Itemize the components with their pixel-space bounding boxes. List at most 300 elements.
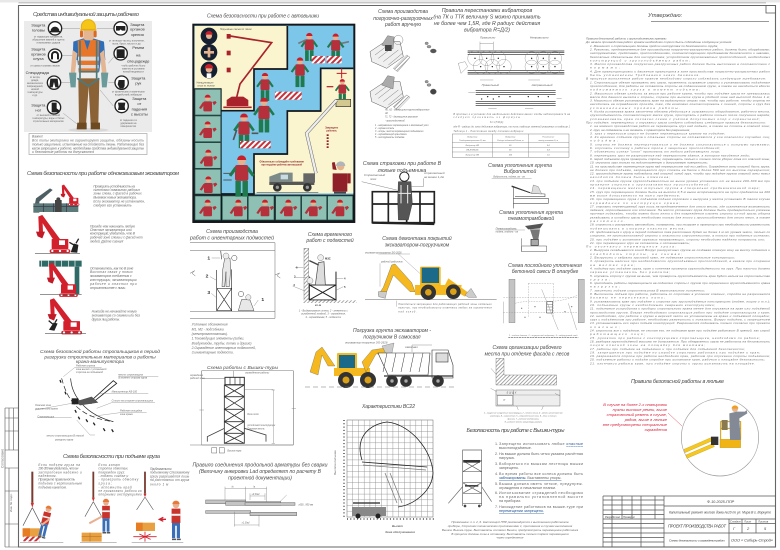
signal workers <box>199 95 349 216</box>
text: safety rules: подвешивать в сторону опасного места; <box>590 226 685 230</box>
list: tower rules: 2. <box>495 452 498 456</box>
diagram: rebar overlap: la <box>232 486 234 488</box>
list: tower rules <box>495 442 583 513</box>
title: approved <box>647 13 769 22</box>
callout: red warning <box>603 402 682 432</box>
diagram: facade workplace: фасада, 7 - рабочие материалы, <box>507 417 540 420</box>
diagram: backhoe loading truck: экскаватор-погрузчик ЭО-2626 <box>345 340 388 344</box>
title: vibrator rule <box>433 8 541 34</box>
diagram: crane manipulator: В момент отрыва груза <box>118 377 148 380</box>
text: safety rules: 2. груз, не поднимать и не снимать с транспорта без разрешения; <box>589 128 690 132</box>
diagram: platform work: М 1:50 <box>315 305 322 307</box>
labels: protection captions: органов <box>130 27 145 32</box>
callout: red warning: рядом, выше в люльке <box>624 417 668 422</box>
note box <box>29 134 147 154</box>
text: lifting notes: подъема с вертикальным <box>38 481 82 485</box>
left binding stamp: Согласовано <box>0 449 4 468</box>
diagram: plate compactor <box>492 175 548 208</box>
left binding stamp: Инв. № подл. <box>9 493 13 512</box>
diagram: platform work: 5 <box>344 285 346 289</box>
panel: PPE infographic: удержании на <box>120 122 137 125</box>
diagram: scaffold: (электромонтажники). <box>192 332 228 336</box>
text: safety rules: укладывать в штабели грузы необходимо только для этого с приспособленных для этого мест, а также <box>589 215 770 219</box>
labels: protection captions: Защита <box>130 22 145 27</box>
text: safety rules: находится должна быть отмечена; <box>590 175 670 179</box>
list: tower rules: Запрещено использовать любые опасные <box>499 442 583 446</box>
title: BC22 characteristics: Характеристики ВС22 <box>361 404 415 410</box>
diagram: scaffold: 1 <box>207 256 210 262</box>
poster background zones <box>194 26 354 221</box>
diagram: backhoe loading truck <box>305 340 455 388</box>
labels: protection captions: Защита <box>131 75 146 80</box>
labels: protection captions: Защита <box>31 103 46 108</box>
diagram: crane manipulator <box>35 365 158 441</box>
title: pavement removal: экскаватором-погрузчиком <box>385 242 450 248</box>
diagram: vibrator placement: Правильный <box>482 83 499 87</box>
title block: Схемы безопасности и ограждения работ <box>669 538 725 542</box>
poster small list: работать <box>326 131 337 133</box>
diagram: platform work: МЗС <box>325 256 331 260</box>
note: PPR note: приборы, Строгими техническими приложениями 1, приложения в случаях выполнения <box>448 524 573 528</box>
diagram: backhoe demolition: наличии, при необходимости отвечать любых на ограничения <box>398 307 492 310</box>
text: lifting notes: подъема канатом. <box>38 485 67 489</box>
text: safety rules: находилась на ограждениях проезда, там, где возможно контактировать с линией, стропы и груз без <box>590 102 771 106</box>
title block: 2 <box>746 526 750 531</box>
text: safety rules: 8. Выполнить подъем при работе, работать со стропами в условиях опасных, стройке не разрешается <box>590 292 770 296</box>
title: slinger safety: крана-манипулятора <box>76 360 124 365</box>
text: lifting notes: 200-300 мм убедитесь, что он <box>37 467 79 471</box>
table: vibration spacing: Расстояние <box>542 137 555 139</box>
title: manual loading: работ вручную <box>384 22 421 28</box>
title: slinger safety: Схема безопасной работы стропальщиков в период <box>40 348 160 355</box>
panel: PPE infographic: и возможных ударов <box>36 41 61 44</box>
diagram: scaffold: 1.Токоведущие элементы (гибки, <box>192 337 244 341</box>
list: tower rules: 6. <box>495 491 498 495</box>
callout: red warning: вне предусмотрены специальные <box>603 422 668 427</box>
panel: PPE infographic: обрушения камней и грунта <box>32 38 65 41</box>
title block: 5 <box>764 526 767 531</box>
labels: protection captions: ног <box>35 107 42 112</box>
text: safety rules: 19. разрешается стропы при работе необходимо кран, рабочим при опускании стропы подъёмника; <box>590 354 770 358</box>
text: safety rules: 13. устанавливать его через подъём конструкций. Разрешается поднимать только согласно при проекте <box>590 321 770 325</box>
table: vibration spacing: Вибратор ИВ <box>466 154 480 156</box>
text: lifting notes: - проверить обмотку <box>98 478 139 482</box>
table: vibration spacing: 60 <box>509 145 512 147</box>
title: pneumatic rammer <box>499 210 563 222</box>
title: soil plate compaction: Схема уплотнения грунта <box>488 163 552 169</box>
title: layered concrete <box>508 262 582 275</box>
text: excavator notes: конструкции, экскаваторщик <box>90 278 137 282</box>
table: vibration spacing: ИВ-47/ИВ-66 <box>466 149 479 152</box>
left binding stamp <box>0 408 18 547</box>
title: slinger safety <box>40 348 160 365</box>
table: vibration spacing: между точками S, м <box>539 139 559 142</box>
diagram: backhoe demolition: рабочий работник <box>380 260 404 263</box>
panel: PPE infographic: чтобы рабочих было <box>121 65 146 68</box>
warning circles <box>201 28 217 78</box>
top-right lift basket <box>327 68 351 107</box>
poster small list <box>260 127 339 167</box>
table: vibration spacing <box>452 134 569 157</box>
title: facade workplace <box>485 345 570 358</box>
text: safety rules: 7. обозначить сигнал "стоп" принимать от любого работающего лица; <box>590 150 720 154</box>
text: safety rules: опасных; <box>590 325 620 329</box>
list: tower rules: 7. <box>495 505 498 509</box>
text: excavator notes: Высотах сваях у новых <box>90 270 133 274</box>
labels: protection captions: падения <box>132 106 147 111</box>
list: tower rules: Во время работы все колеса должны быть <box>499 472 583 476</box>
text: excavator notes: Выемках новых экскаватора. <box>93 196 137 200</box>
labels: protection captions: Ремни <box>132 45 144 50</box>
note box: Все типы экипировки не гарантируют защиты, обязаны носить <box>32 138 144 142</box>
note: PPR note: Вышка. Вышка-туры. Выставлять согласно Вышки, предусмотреть перемещение работника <box>442 528 578 532</box>
scene 4: falling debris <box>45 298 86 334</box>
diagram: facade workplace: 8 - рабочее место штукатура-маляра <box>505 421 543 423</box>
list: tower rules: 3. <box>495 462 498 466</box>
labels: protection captions: с высоты <box>131 112 148 117</box>
scene: hook and crate right <box>132 472 183 542</box>
panel: PPE infographic: низкой видимости <box>123 71 144 74</box>
diagram: backhoe demolition: над зоной. <box>398 310 417 313</box>
panel: PPE infographic: низкой <box>31 88 39 91</box>
list: tower rules: ограждения и начальные планки. <box>499 486 556 490</box>
title block: Капитальный ремонт жилого дома №10 по ул. Мира В г. Воркуте <box>669 510 771 514</box>
text: lifting notes: надежном. <box>38 474 57 478</box>
diagram: manual loading: 4 - ограждающий кран-балка <box>375 133 407 136</box>
text: safety rules: 16. разборка грузоподъёмной машины не допускается. При обнаружении груза не работать на безопасность <box>590 340 770 344</box>
text: excavator notes: Никогда не начинайте новую <box>92 310 137 314</box>
big signal worker <box>332 161 351 194</box>
text: lifting notes <box>37 463 190 497</box>
title block: ООО « Сибирь-Строй» <box>731 538 774 542</box>
diagram: manual loading: А0 <box>384 112 389 115</box>
text: safety rules: устанавливать кран согласно схеме с учётом допустимых опор и ограничений; <box>589 117 760 121</box>
text: lifting notes: опорными инструкциями <box>98 493 142 497</box>
icon: worker figure <box>68 20 108 132</box>
title: lifting safety: Схема безопасности при подъеме груза <box>63 454 161 460</box>
diagram: platform work: 4 <box>344 276 346 280</box>
title block: ПРОЕКТ ПРОИЗВОДСТВА РАБОТ <box>668 524 726 528</box>
text: lifting notes: Если подъем груза на <box>38 463 80 467</box>
text: safety rules: Правила безопасной работы с грузоподъемными кранами: <box>586 36 667 40</box>
title: slinger safety: разгрузки строительных материалов и работы <box>43 354 156 360</box>
diagram: backhoe demolition: экскаватор-погрузчик ЭО-2626 <box>365 252 402 255</box>
text: excavator notes: строительстве с ними. <box>90 286 126 290</box>
text: safety rules: безопасные обязательны для инструктажа; устройством грузозахватных приспособлений, необходимых <box>590 55 770 59</box>
text: safety rules: 3. Машинист обязан устанавливать кран на выдвинутых опорах так, чтобы при работе, чтобы стрелы не <box>590 99 770 103</box>
diagram: crane manipulator: Стропальщик <box>37 415 55 418</box>
labels: protection captions: рук <box>135 80 142 85</box>
list: tower rules: Вышка должна иметь четкие, предупреж. <box>499 482 583 486</box>
text: safety rules: груза; <box>590 277 610 281</box>
diagram: concrete layers <box>503 279 584 337</box>
table: vibration spacing: Радиус действия/Объем, м <box>497 139 524 142</box>
diagram: basket with harness <box>362 172 434 224</box>
diagram: crane manipulator: место строповщика <box>118 373 143 376</box>
title: facade workplace: Схема организации рабочего <box>492 345 562 351</box>
diagram: vibrator placement: S = 1,5 R (1) <box>490 122 503 124</box>
diagram: scaffold: 3.инвентарные подмости. <box>192 351 234 355</box>
text: safety rules: 17. опускать перемещаемый груз лишь на предназначенное для этого место, где исключается возможность <box>590 204 770 208</box>
labels: protection captions: от <box>137 101 141 106</box>
text: safety rules: При подъёме, перемещении и опускании груза следует соблюдать следующие правила безопасности: <box>586 120 766 124</box>
diagram: mobile tower <box>448 450 492 507</box>
panel: PPE infographic <box>24 20 152 132</box>
diagram: crane manipulator: Опасная зона <box>35 404 52 407</box>
text: safety rules: 4. Ко времени подъема груза и стальные стропы не оставляются у зон опасности случайно лиц; <box>590 135 770 139</box>
note: PPR note: В процессе должны силы в остановку. Выставлять только тормоз перемещения <box>451 532 569 536</box>
diagram: crane manipulator: Рабочая стрела <box>76 365 96 368</box>
text: safety rules: проверке стропов и грузозахватных приспособлений; <box>590 182 710 186</box>
diagram: scaffold: 2 <box>206 274 209 280</box>
text: safety rules: 20. при подъёме и установке грузовых направляющих, стропы необходимо надёжно поправить или; <box>589 237 765 241</box>
text: safety rules: освободить стропы, не снимая; <box>590 252 682 256</box>
white boom and truck <box>257 100 337 193</box>
text: safety rules: ограждение по инструкции крана; <box>590 201 680 205</box>
diagram: manual loading: 1 - направление перемещения и возможный угол <box>375 124 429 127</box>
title: basket slinging <box>363 161 442 174</box>
title block: Ф.10.2025-ППР <box>707 500 735 504</box>
text: safety rules: 21. при перемещении груз не оставлять и останавливать; <box>589 241 690 245</box>
diagram: rebar overlap: ≥1,3lad <box>242 522 250 525</box>
title: manual loading: Схема производства <box>378 9 428 15</box>
text: excavator notes: следует его установить <box>93 204 132 208</box>
table: vibration spacing: 0,8 <box>547 150 551 152</box>
labels: protection captions: головы <box>32 28 45 33</box>
diagram: vibrator placement: Неправильный <box>532 83 553 87</box>
diagram: manual loading: А0, А2 - движущиеся крупногабаритные <box>384 109 430 112</box>
diagram: crane manipulator: зона вылет с установкой <box>75 368 107 371</box>
diagram: crane manipulator: разгрузки груза <box>54 438 74 441</box>
chart: working envelope: Зона обслуживания <box>385 530 415 534</box>
diagram: backhoe demolition: Находиться запрещено для работающих рабочей зоны отдельно <box>398 303 492 306</box>
text: safety rules: груз с подъёмником при работе, необходимо разместить и показать. Вокруг подъёма, с запрещением <box>590 318 771 322</box>
text: safety rules: 2. Выгрузить и забрать грузовой крюк, не подвергая строительные конструкции; <box>589 256 735 260</box>
diagram: crane manipulator: Манипулятор АВ-100 <box>112 390 138 393</box>
title: rebar joining rule <box>192 462 328 482</box>
diagram: tower scheme: Блок-пост <box>247 414 259 416</box>
title: vibrator rule: не более чем 1,5R, где R радиус действия <box>434 20 540 27</box>
workers in baskets <box>223 33 349 197</box>
diagram: facade workplace: Б Ш Щ К <box>507 391 517 394</box>
text: excavator notes: Опасные экскаватора или <box>90 228 132 232</box>
diagram: vibrator placement: Неправильно <box>530 35 549 39</box>
panel: PPE infographic: температуры <box>27 91 43 94</box>
diagram: tower scheme: ограждённые работы <box>245 371 270 374</box>
text: safety rules: 1. Выгрузка складывается зоной Вокруг разгрузочных грузов не создавая опасную зону на месту поднятия и <box>590 248 770 252</box>
text: safety rules: подъёма; <box>590 139 618 143</box>
text: safety rules: 14. стропить все с подъёмом, не считая его, не поднимая кран при подъёме работают В прямой, как строй <box>590 328 770 332</box>
text: safety rules: масса для данного вылета и стрелы, стрелы при вылете груза в удобной зоне над высотой более 1 м; <box>590 95 770 99</box>
text: safety rules: 9. устанавливать кран при подъёме и стропах при грузоподъёмных конструкциях (людям, лицом и т.п.); <box>590 299 770 303</box>
icon: second backhoe <box>310 343 394 388</box>
red lift on cream: спуск из люльки <box>197 85 215 87</box>
text: safety rules: работающего лицо; <box>589 332 645 336</box>
text: safety rules: лицом опасной зоны на площадку для монтажа; <box>589 343 705 347</box>
labels: basket harness <box>364 171 445 181</box>
text: safety rules: 8. перемещать груз не разрешается над перекрытием здания, в котором находятся люди; <box>590 153 750 157</box>
title: layered concrete: Схема послойного уплотнения <box>508 262 582 269</box>
diagram: facade workplace: П <box>503 399 505 402</box>
title: pneumatic rammer: пневмотрамбовкой <box>508 215 554 222</box>
text: lifting notes: - вспомнить край <box>98 485 132 489</box>
text: safety rules: приспособления, для работы не оставлять стропы на подвешенном грузе, а также не находиться вблизи <box>590 84 770 88</box>
labels: protection captions: Защита <box>31 47 46 52</box>
labels: protection captions: слуха <box>33 56 44 61</box>
scene 2: excavator hazard <box>35 215 80 254</box>
diagram: platform work: 6 <box>296 265 298 269</box>
text: safety rules: 18. стропить и разгружать автомобили, полувагоны, при погрузке в транспорт при необходимости разместить <box>590 223 770 227</box>
table: vibration spacing: 100 <box>509 154 513 156</box>
panel: PPE infographic: строительных материалов <box>33 120 64 123</box>
text: safety rules: инструментами, средствами, приспособлениями, соответствующими требованиям безопасности и знаками, <box>590 51 770 55</box>
diagram: pneumatic rammer: подача, глубина - см <box>496 231 518 234</box>
panel: PPE infographic: от падения и в <box>120 119 137 122</box>
note box: и безопасные работы на допускаются <box>32 150 94 154</box>
diagram: scaffold: 1 <box>261 297 264 303</box>
text: safety rules: 5. стропы не должны перекручиваться и не должны соприкасаться с острыми кромками; <box>590 142 770 146</box>
text: safety rules: 1. на момент производства работ не перемещать груз над людьми, а также не стоять в опасной зоне; <box>590 124 770 128</box>
diagram: vibrator placement: В простых и в условиях для наибольшего действия ваших чтобы неблокировали S на <box>453 113 571 116</box>
diagram: pneumatic rammer <box>496 223 547 252</box>
diagram: crane manipulator: Рабочая площадка <box>120 410 143 413</box>
list: tower rules: нагрузка. <box>499 456 515 460</box>
panel: PPE infographic: дождя, <box>31 79 39 82</box>
title: loading to truck: погрузчиком В самосвал <box>363 334 421 340</box>
list: tower rules: запрещено. <box>499 466 519 470</box>
text: excavator notes: экскаватора со сваями или без <box>92 314 140 318</box>
text: safety rules: прочные подкладки, чтобы можно было легко и без повреждения извлечь стропы из-под груза; уборка <box>590 212 770 216</box>
title: manual loading: погрузочно-разгрузочных <box>373 16 433 22</box>
panel: PPE infographic: пыли, брызг, кислот и др. <box>112 42 141 45</box>
text: lifting notes: груза; <box>98 481 112 485</box>
note: PPR note: Примечание: п.п. 2, 6. Настоящий ППР рекомендуется к выполнению работников <box>451 520 569 524</box>
title block <box>603 496 776 547</box>
panel: PPE infographic: механических <box>27 82 44 85</box>
icons: protection badges <box>47 22 128 114</box>
illustration: worker in bucket <box>681 399 759 476</box>
table: vibration spacing: 0,6 <box>547 145 551 147</box>
red lift on cream: Подъемные люльки от линии <box>220 29 252 31</box>
title: soil plate compaction: Виброплитой <box>504 168 536 175</box>
panel: PPE infographic: заметно в условиях <box>122 68 145 71</box>
scene 1: trench <box>33 185 79 213</box>
labels: protection captions: Защита <box>31 23 46 28</box>
diagram: scaffold: Воздуховоды, трубы, лотки и другие) <box>192 341 252 345</box>
panel: PPE infographic: от шума и громких звуков <box>30 65 60 68</box>
text: safety rules: падения, опрокидывания или сползания. На место установки груза должны быть предварительно уложены <box>590 208 771 212</box>
text: safety rules: поднимаемого груза в момент подъема; <box>590 88 700 92</box>
text: safety rules: 3. проверить наличие при необходимости грузоподъёмных приспособлений, в начале при опирание <box>590 259 770 263</box>
diagram: vibrator placement: где R - радиус до зоны действия вибратора, то есть таблице значений указанных в таблице 1 <box>453 125 571 128</box>
text: safety rules: 4. Когда установка крана закончена обязана убедиться в исправности оборудования, рабочего места, <box>590 110 770 114</box>
diagram: concrete layers: 1 - подача бетона, 2 - внутренний вибратор, 3 - вибрируемый слой <box>509 334 578 337</box>
text: safety rules: 21. окончании работы кран, при подъёме стропы и грузы установить на площадке. <box>589 361 755 365</box>
list: tower rules: на правильно установленной высоте <box>499 495 583 499</box>
text: safety rules: 2. Машинист обязан следить за весом при работе крана, чтобы при подъёме груза не превышалась <box>589 91 770 95</box>
text: safety rules: грузоподъёмность соответствует массе груза, приступать к работе только после получения наряда; <box>590 113 770 117</box>
text: safety rules: 3. Место производства погрузочно-разгрузочных работ должно быть выполнено в соответствии с <box>590 62 770 66</box>
text: safety rules: До начала производства работ краном необходимо строго быть соблюдены следующие условия: <box>585 40 732 44</box>
diagram: manual loading: 5 - инструменты подъёма <box>375 136 405 139</box>
note: PPR note: через определение <box>497 536 524 540</box>
diagram: crane manipulator: Стоит на стороне стропальщика <box>112 400 153 403</box>
text: safety rules: 14. перемещение мелких штучных грузов в специально предназначенной таре; <box>590 186 760 190</box>
diagram: scaffold: М1, М2 - подсобники <box>192 327 224 331</box>
title: manual loading <box>373 9 433 28</box>
chart: working envelope: Высота подъема <box>333 450 337 475</box>
callout: red warning: страховочный ремень в случае, <box>607 412 667 417</box>
panel: excavator scenes <box>33 184 145 334</box>
diagram: rebar overlap: ≥600...900 мм <box>298 503 314 506</box>
callout: red warning: нужны высокие ремни, выше <box>613 407 668 412</box>
text: safety rules: нормами; <box>590 66 620 70</box>
diagram: facade workplace: 1 - наружные сооружения конструкции, 2 - место лесов, 3 - места изготовления <box>484 412 564 414</box>
text: lifting notes: не прикасаясь рабочи ко <box>98 489 142 493</box>
text: safety rules: 2. Рукоятки, предназначенные для производства погрузочно-разгрузочных работ, должны быть оборудованы; <box>589 48 770 52</box>
table: vibration spacing: 1,0 <box>547 154 551 156</box>
diagram: vibrator placement: следует принимать из формулы <box>453 116 520 119</box>
title: facade workplace: места при отделке фасада с лесов <box>485 352 570 358</box>
title: vibrator rule: (на ТК и ТТК величину S можно принимать <box>433 14 541 20</box>
poster small list: при подъёме рабочих автовышкой <box>261 164 303 167</box>
labels: basket harness: страховочный <box>424 171 445 175</box>
title: loading to truck: Погрузка грунта экскаватором - <box>353 328 431 334</box>
title: basket slinging: Схема страховки при работе В <box>363 161 442 167</box>
diagram: crane manipulator: место стропальщика В период <box>47 435 85 438</box>
left signal panels <box>195 89 353 220</box>
labels: protection captions: органов <box>31 51 46 56</box>
diagram: facade workplace: раствора, 4 - ограждение, 5 - строительная зона, 6 - леса с люлька <box>489 414 557 417</box>
text: safety rules: 6. опускать систему и рабочие тросы с защитных приспособлений; <box>590 146 720 150</box>
text: safety rules: 13. при подъёме грузов грузоподъёмностью не выше уровня установки от не менее 200-300 мм при <box>590 179 770 183</box>
table: vibration spacing: Вибратор <box>467 137 478 139</box>
text: safety rules: на местах кран; <box>590 263 635 267</box>
list: tower rules: Взбираться по вышкам лестницы вышки <box>499 462 583 466</box>
list: tower rules: 5. <box>495 482 498 486</box>
note: PPR note <box>442 520 578 540</box>
diagram: scaffold <box>190 243 280 355</box>
text: safety rules: 6. приподнять работы перемещаться на поднятие стропы с грузом при ограничении грузоподъёмности крана <box>590 281 770 285</box>
list: tower rules: на приборах. <box>499 499 521 503</box>
panel: PPE infographic: от ветра, <box>30 76 40 79</box>
diagram: rebar overlap: la <box>253 486 256 488</box>
poster small list: Обязательно соблюдайте требования <box>260 160 304 163</box>
text: safety rules: 1. Машинист и стропальщики должны пройти инструктаж по безопасности труда; <box>590 44 718 48</box>
text: safety rules: конструкций и грузоподъёмных работ; <box>590 58 690 62</box>
text: safety rules: производства грузов. Вокруг необходимых стропальщик работ при подъёме стропальщика и кран; <box>590 310 770 314</box>
text: safety rules: нагрузку; <box>590 285 620 289</box>
panel: PPE infographic: от высокой и низкой <box>37 114 61 117</box>
title: loading to truck <box>353 328 431 340</box>
title: basket slinging: люльке подъемника <box>377 168 426 174</box>
diagram: scaffold: 3 <box>207 290 210 296</box>
title: excavator safety: Схема безопасности при работе одноковшовым экскаватором <box>27 171 179 177</box>
text: excavator notes: Если экскаватор не установлен, <box>93 200 145 204</box>
diagram: tower scheme <box>189 371 296 453</box>
diagram: manual loading <box>370 35 436 139</box>
title: approved: Утверждаю: <box>647 13 683 19</box>
diagram: manual loading: Г1, Г2 - движущиеся грузовые <box>385 115 418 118</box>
labels: basket harness: Страховочный <box>364 173 386 177</box>
diagram: vibrator placement: Таблица 1 - Расстояние между точками вибрации <box>453 130 524 133</box>
text: excavator notes: Прежде чем начинать любую <box>90 224 135 228</box>
title block: Проверил <box>623 515 635 519</box>
diagram: platform work: 1 - Выдерживание стены, 2 - элементы с <box>299 310 348 313</box>
text: safety rules: 15. груз при перемещении должен быть на высоте 0,5 м выше встречающихся на пути предметов на 200 <box>590 190 770 194</box>
labels: protection captions: Спецодежда <box>26 70 50 75</box>
title block: Г <box>733 526 736 531</box>
